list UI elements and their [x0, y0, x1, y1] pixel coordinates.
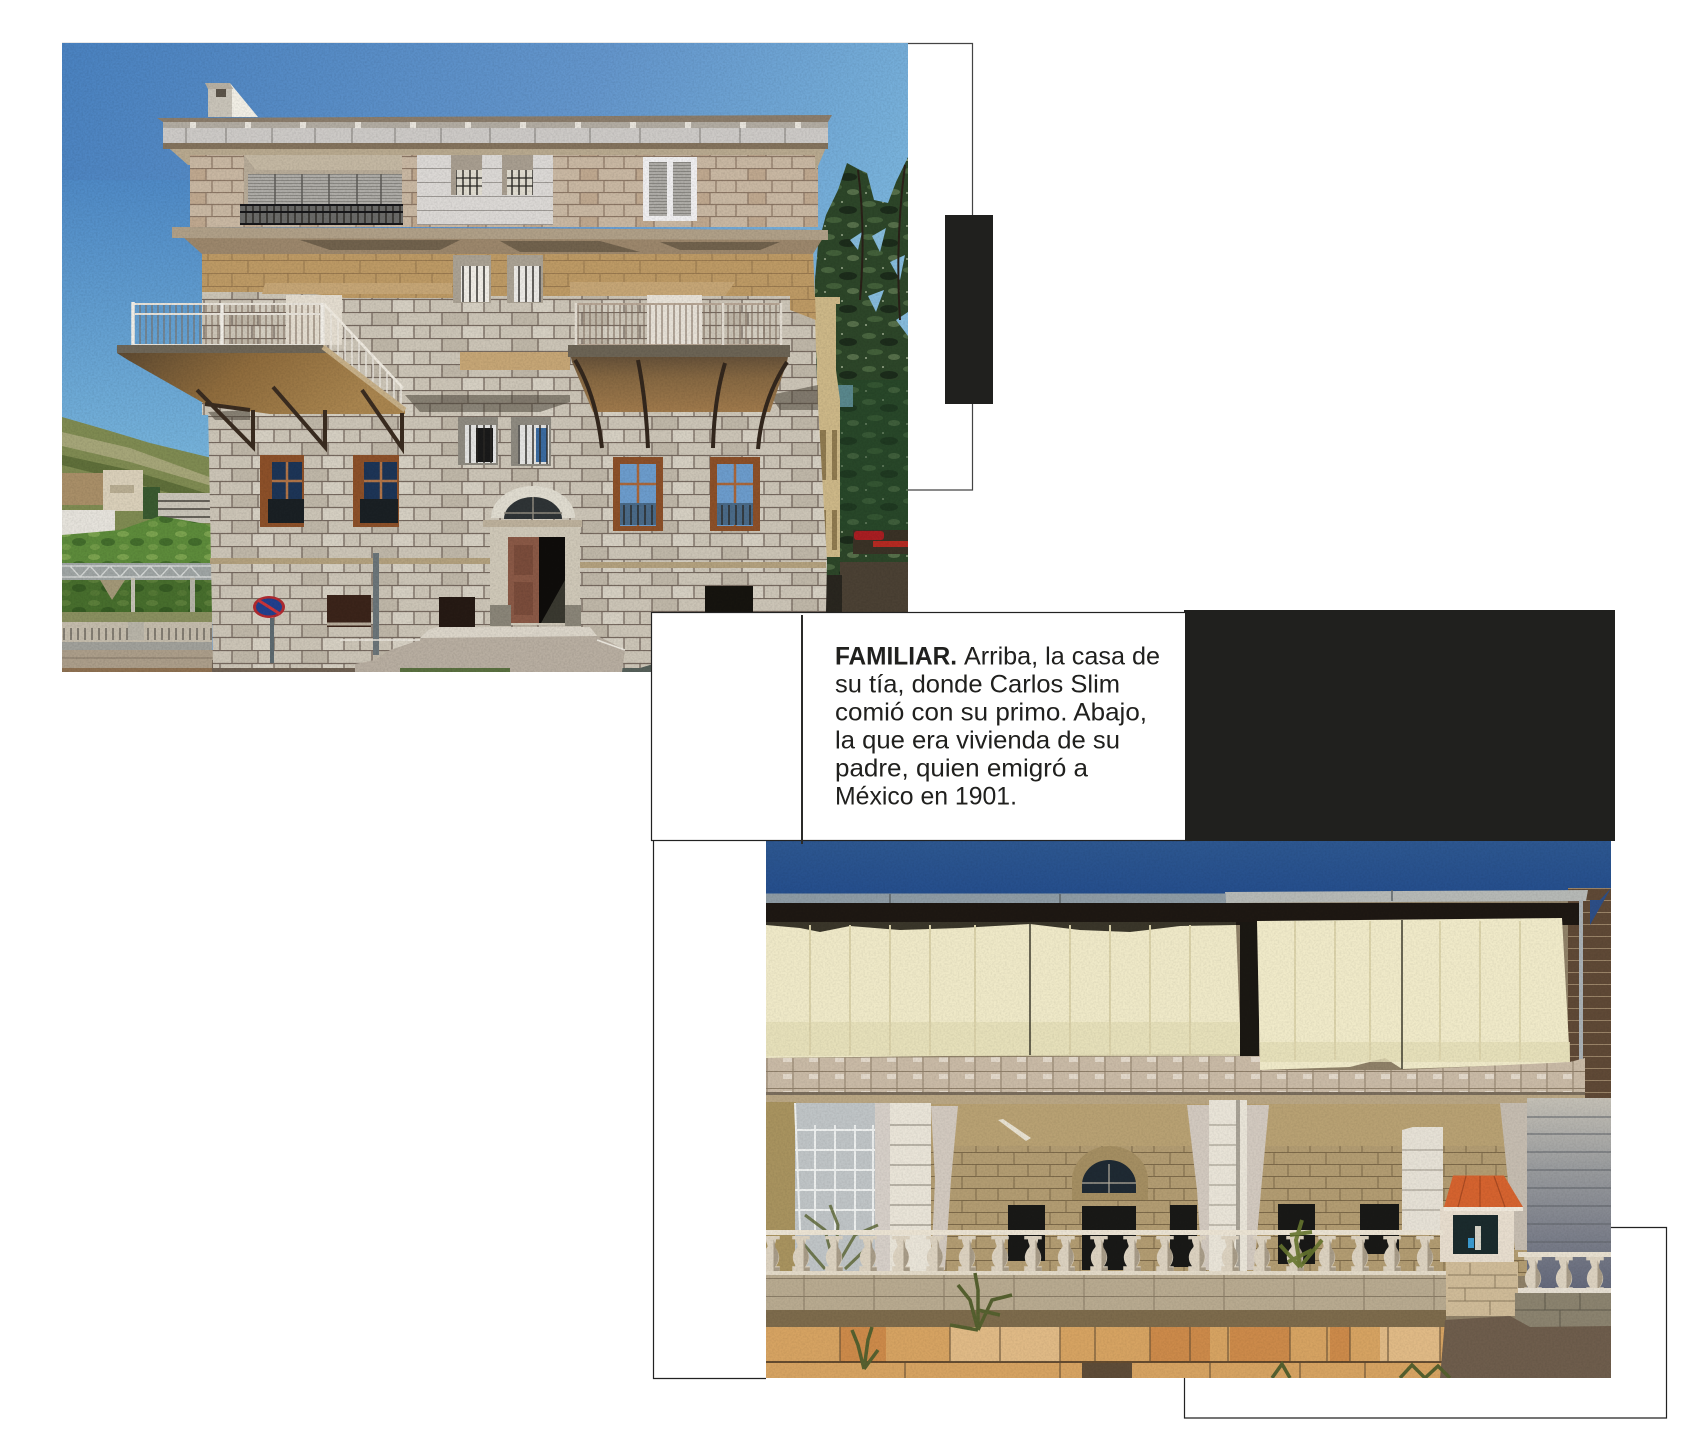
second-floor slab — [172, 227, 828, 254]
caption text: su tía, donde Carlos Slim — [835, 670, 1120, 698]
short pier 3 — [1402, 1127, 1443, 1232]
dark band — [766, 1310, 1446, 1327]
ledge — [766, 1092, 1585, 1104]
right lower wall — [1515, 1293, 1611, 1327]
curtains left pair — [766, 922, 1241, 1058]
pipe — [1579, 900, 1583, 1075]
right balcony brackets — [575, 360, 787, 449]
caption text: la que era vivienda de su — [835, 726, 1120, 754]
arched entrance — [483, 486, 582, 626]
photo: father's house — [762, 841, 1611, 1378]
photo grain — [766, 841, 1611, 1378]
chimney — [205, 83, 258, 117]
wooden window 4 — [710, 457, 760, 531]
horizontal stone band — [210, 558, 826, 568]
frame: lower-left photo outline — [654, 835, 766, 1378]
frame: top photo outline — [62, 44, 972, 490]
background hill and buildings left — [62, 417, 213, 672]
entrance stairs — [340, 627, 625, 672]
right balustrade — [1518, 1252, 1611, 1294]
back wall — [931, 1146, 1527, 1276]
plant right — [1280, 1220, 1322, 1267]
orange stone base — [766, 1327, 1448, 1378]
pier 1 — [890, 1103, 931, 1271]
photo: aunt's stone house — [62, 43, 908, 672]
caption divider line — [801, 615, 803, 844]
ochre upper band — [202, 250, 816, 320]
balcony balustrade — [762, 1230, 1443, 1273]
roof cornice — [157, 115, 832, 173]
grey block wall — [1527, 1098, 1611, 1294]
curtain 1 — [931, 1106, 958, 1270]
shrine base — [1446, 1262, 1518, 1316]
left balcony brackets — [197, 387, 402, 448]
fluorescent light — [998, 1119, 1031, 1141]
frame: lower-right photo outline — [1184, 1228, 1666, 1418]
curtains right pair — [1257, 918, 1570, 1070]
curtain 2 — [1187, 1105, 1209, 1270]
photo grain — [62, 43, 908, 672]
right brick wall — [1568, 888, 1611, 1098]
wall grime — [208, 385, 818, 420]
curtain 3 — [1247, 1105, 1269, 1270]
stucco strip and wall patches — [262, 282, 735, 370]
caption box — [652, 612, 1192, 840]
arched window — [1072, 1146, 1148, 1200]
basement windows — [327, 586, 753, 628]
low wall — [766, 1271, 1446, 1311]
caption text: FAMILIAR. — [835, 642, 957, 670]
caption text: comió con su primo. Abajo, — [835, 698, 1147, 726]
curtain 4 — [1500, 1103, 1527, 1250]
dirt bank — [1440, 1316, 1611, 1378]
background tree and cream tower right — [815, 157, 908, 612]
drain pipe — [373, 553, 379, 655]
left balcony — [117, 302, 405, 414]
ceiling — [931, 1104, 1510, 1146]
wooden window 1 — [260, 455, 304, 527]
shrine — [1440, 1176, 1523, 1262]
doors behind balconies — [286, 295, 342, 345]
caption text: México en 1901. — [835, 782, 1017, 810]
caption text: padre, quien emigró a — [835, 754, 1088, 782]
second-floor windows — [453, 255, 543, 303]
wooden window 3 — [613, 457, 663, 531]
no-parking sign — [253, 596, 285, 663]
ground and road — [212, 660, 355, 672]
right balcony — [568, 303, 790, 412]
left stone wall — [766, 1102, 796, 1272]
photo base — [768, 901, 1568, 1320]
black caption panel — [1184, 610, 1615, 841]
bay window — [795, 1103, 890, 1271]
lower middle windows — [458, 417, 551, 466]
caption text: Arriba, la casa de — [964, 642, 1160, 670]
sky — [766, 841, 1611, 901]
building middle wall — [202, 250, 818, 415]
dark doors and windows — [1008, 1204, 1399, 1270]
black bar beside top photo — [945, 215, 993, 404]
building lower wall — [208, 405, 827, 668]
dark gap between curtains — [1240, 922, 1259, 1057]
roof gutter and soffit — [766, 890, 1588, 925]
plant left — [800, 1205, 878, 1269]
wall bushes — [852, 1273, 1450, 1378]
wooden window 2 — [353, 455, 399, 527]
top floor walls — [190, 155, 818, 227]
stone fascia — [766, 1056, 1585, 1092]
pier 2 — [1209, 1100, 1247, 1271]
caption text — [835, 642, 1160, 810]
